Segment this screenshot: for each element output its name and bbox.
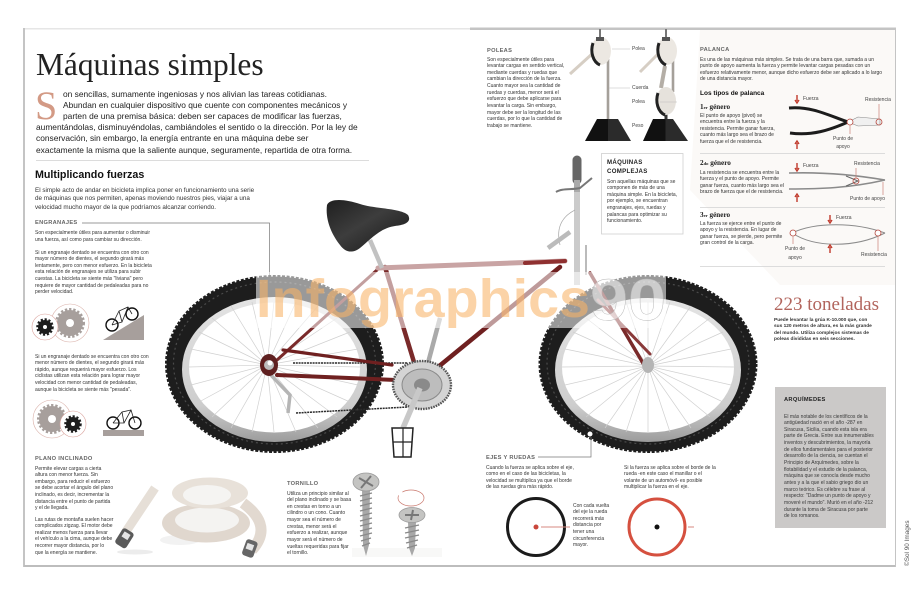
text: poleas: Cuanto mayor sea la cantidad de <box>487 83 560 89</box>
frame <box>277 261 650 380</box>
text: tornillo: vueltas requeridas para fijar <box>287 544 349 550</box>
text: circumference note: tener una <box>573 529 594 535</box>
heading: primer género: 1er género <box>700 102 730 110</box>
text: poleas: Son especialmente útiles para <box>487 56 554 62</box>
text: plano inclinado <box>35 466 113 511</box>
text: máquinas complejas: por ejemplo, se encuentran <box>607 198 668 204</box>
text: plano inclinado: inclinado, es decir, incrementar la <box>35 492 109 498</box>
text: engranaje mayor: perder velocidad. <box>35 289 73 295</box>
text: arquímedes: durante la toma de Siracusa por parte <box>784 507 868 513</box>
text: máquinas complejas: Son aquellas máquinas que se <box>607 178 675 184</box>
text: máquinas complejas: componen de más de una <box>607 185 665 191</box>
text: arquímedes: El más notable de los científicos de la <box>784 414 868 420</box>
label: resistencia 2: Resistencia <box>854 161 880 167</box>
text: arquímedes: respecto: "Dadme un punto de apoyo y <box>784 493 871 499</box>
text: máquinas complejas: máquina simple. En la bicicleta, <box>607 192 677 198</box>
text: segundo género: La resistencia se encuentra entre la <box>700 170 779 176</box>
text: segundo género: brazo de fuerza que el de resistencia. <box>700 189 783 195</box>
label: punto de apoyo 2: Punto de apoyo <box>850 196 885 202</box>
text: engranaje menor: aunque la bicicleta se siente más "pesada". <box>35 387 131 393</box>
text: tornillo: Utiliza un principio similar al <box>287 490 349 496</box>
text: tercer género: gran control de la carga. <box>700 240 754 246</box>
text: tornillo <box>287 490 352 556</box>
heading: ejes y ruedas: EJES Y RUEDAS <box>486 455 535 461</box>
text: engranaje mayor: requiere de mayor cantidad de pedaleadas para no <box>35 283 148 289</box>
label: fuerza 1: Fuerza <box>803 96 819 102</box>
text: palanca: esfuerzo relativamente menor, aunque dicho esfuerzo debe ser aplicado a lo largo <box>700 70 882 76</box>
text: palanca: punto de apoyo aumenta la fuerza y permite levantar cargas pesadas con un <box>700 63 870 69</box>
handlebar <box>548 160 592 285</box>
text: tercer género: ganar fuerza, se pierde, pero permite <box>700 234 782 240</box>
text: primer género: cuanto más largo sea el brazo de <box>700 132 774 138</box>
text: poleas: levantar cargas en sentido vertical, <box>487 63 564 69</box>
text: palanca <box>700 56 882 82</box>
text: engranaje mayor: mayor número de dientes, el segundo girará más <box>35 256 144 262</box>
text: poleas <box>487 56 564 129</box>
text: rutas de montaña: el vehículo a la cima, aunque debe <box>35 536 112 542</box>
text: engranaje menor: velocidad con menor cantidad de pedaleadas, <box>35 380 137 386</box>
text: engranaje menor: ciclistas utilizan esta relación para lograr mayor <box>35 373 140 379</box>
text: engranaje menor: Si un engranaje dentado se encuentra con otro con <box>35 354 149 360</box>
text: ejes y ruedas eje: de las ruedas gira más rápido. <box>486 484 553 490</box>
label: punto de apoyo 3: apoyo <box>788 254 802 260</box>
text: arquímedes: marco teórico. Es célebre su frase al <box>784 487 865 493</box>
icon: bicycle on slope <box>103 307 144 340</box>
heading: máquinas complejas: MÁQUINAS <box>607 159 643 166</box>
text: poleas: levantar la carga. Sin embargo, <box>487 103 556 109</box>
text: plano inclinado: Permite elevar cargas a cierta <box>35 466 101 472</box>
wheel: axle force <box>508 498 570 556</box>
label: resistencia 1: Resistencia <box>865 97 891 103</box>
text: arquímedes: moveré el mundo". Murió en el año -212 <box>784 500 873 506</box>
box: arquímedes background <box>775 387 886 528</box>
text: engranajes <box>35 230 150 243</box>
text: segundo género: fuerza y el punto de apoyo. Permite <box>700 176 779 182</box>
text: engranaje mayor: esta relación de engranajes se utiliza para subir <box>35 269 141 275</box>
text: máquinas complejas: palancas para optimizar su <box>607 212 667 218</box>
text: arquímedes: máquina que se conocía desde mucho <box>784 473 870 479</box>
lever: second class nutcracker <box>789 163 885 202</box>
callout text: poleas divididas en seis secciones. <box>774 337 855 342</box>
callout text: Puede levantar la grúa K-10.000 que, con <box>774 318 867 322</box>
pulley: single <box>570 29 631 141</box>
intro text: parten de una premisa básica: deben ser capaces de modificar las fuerzas, <box>63 111 342 121</box>
bicycle <box>166 160 756 457</box>
text: rutas de montaña <box>35 516 114 556</box>
text: multiplicando fuerzas: El simple acto de andar en bicicleta implica poner en funcionamiento una serie <box>35 186 254 194</box>
credit: ©Sol 90 Images <box>904 520 911 566</box>
text: engranaje mayor: cuestas. La bicicleta se siente más "liviana" pero <box>35 276 143 282</box>
text: plano inclinado: y el de llegada. <box>35 505 69 511</box>
text: primer género: resistencia. Permite ganar fuerza, <box>700 126 775 132</box>
text: tornillo: mayor sea el número de <box>287 517 341 523</box>
rear derailleur and hub <box>260 354 290 413</box>
heading: tornillo: TORNILLO <box>287 481 318 487</box>
text: circumference note: Con cada vuelta <box>573 502 609 508</box>
text: ejes y ruedas borde: multiplicar la fuerza en el eje. <box>624 484 689 490</box>
text: arquímedes: antes y a la que el sabio griego dio un <box>784 480 868 486</box>
text: tornillo: mayor será el número de <box>287 537 343 543</box>
text: ejes y ruedas eje: velocidad se multiplica ya que el borde <box>486 478 572 484</box>
text: rutas de montaña: complicados zigzag. El motor debe <box>35 523 113 529</box>
text: rutas de montaña: realizar menos fuerza para llevar <box>35 530 108 536</box>
text: segundo género <box>700 170 784 195</box>
text: palanca: de una distancia mayor. <box>700 76 753 82</box>
text: plano inclinado: se debe acortar el ángulo del plano <box>35 485 113 491</box>
icon: gears small driving large <box>32 304 89 342</box>
heading: máquinas complejas: COMPLEJAS <box>607 168 648 175</box>
text: ejes y ruedas eje: Cuando la fuerza se aplica sobre el eje, <box>486 464 574 470</box>
label: resistencia 3: Resistencia <box>861 252 887 258</box>
text: arquímedes: de los romanos. <box>784 513 820 519</box>
text: arquímedes: desarrollo de la ciencia, se cuentan el <box>784 453 868 459</box>
seat post <box>370 240 382 268</box>
crank and chainring <box>392 318 451 457</box>
heading: multiplicando fuerzas: Multiplicando fuerzas <box>35 169 144 181</box>
text: tercer género: apoyo y la resistencia. En lugar de <box>700 227 776 233</box>
text: poleas: mediante cuerdas y ruedas que <box>487 70 557 76</box>
text: tercer género: La fuerza se ejerce entre el punto de <box>700 220 781 226</box>
rear wheel <box>166 276 382 452</box>
label: punto de apoyo 1: Punto de <box>833 136 853 142</box>
text: poleas: esfuerzo que debe aplicarse para <box>487 96 561 102</box>
text: palanca: Es una de las máquinas más simples. Se trata de una barra que, sumada a un <box>700 56 874 62</box>
text: tornillo: crestas, menor será el <box>287 524 336 530</box>
text: poleas: cambian la dirección de la fuerza. <box>487 76 562 82</box>
heading: palanca: PALANCA <box>700 47 729 53</box>
text: tornillo: esfuerzo a realizar, aunque <box>287 530 347 536</box>
label: fuerza 2: Fuerza <box>803 163 819 169</box>
text: plano inclinado: embargo, para reducir el esfuerzo <box>35 479 110 485</box>
icon: gears large driving small <box>33 400 86 438</box>
text: rutas de montaña: recorrer mayor distancia, por lo <box>35 543 104 549</box>
text: arquímedes: flotabilidad y el estudio de la palanca, <box>784 467 867 473</box>
icon: screws <box>352 473 442 557</box>
heading: plano inclinado: PLANO INCLINADO <box>35 456 93 462</box>
text: ejes y ruedas eje: como en el caso de las bicicletas, la <box>486 471 566 477</box>
label: fuerza 3: Fuerza <box>836 215 852 221</box>
text: primer género: fuerza que el de resistencia. <box>700 139 763 145</box>
text: tornillo: el tornillo. <box>287 550 308 556</box>
text: arquímedes: de ellos fundamentales para el posterior <box>784 447 873 453</box>
text: poleas: trabajo se mantiene. <box>487 123 532 129</box>
text: circumference note: circunferencia <box>573 536 604 542</box>
intro text: on sencillas, sumamente ingeniosas y nos alivian las tareas cotidianas. <box>63 88 327 98</box>
text: tornillo: en crestas en torno a un <box>287 504 341 510</box>
label: punto de apoyo 1 <box>833 136 853 150</box>
text: rutas de montaña: Las rutas de montaña suelen hacer <box>35 516 113 522</box>
front wheel <box>540 276 756 452</box>
pulley: compound <box>640 29 688 141</box>
text: engranaje mayor: lentamente, pero con menor esfuerzo. En la bicicleta <box>35 263 152 269</box>
front hub <box>642 357 654 373</box>
icon: spiral road <box>114 478 261 559</box>
intro text: exactamente la misma que la saliente aunque, seguramente, repartida de otra forma. <box>36 145 352 155</box>
heading: máquinas complejas <box>607 158 648 175</box>
heading: poleas: POLEAS <box>487 48 512 54</box>
lever: first class pliers <box>789 95 882 149</box>
wheel: rim force <box>629 499 694 555</box>
text: máquinas complejas <box>607 178 677 224</box>
callout text: del mundo. Utiliza complejos sistemas de <box>774 331 869 336</box>
text: plano inclinado: distancia entre el punto de partida <box>35 499 110 505</box>
text: tornillo: cilindro o un cono. Cuanto <box>287 510 345 516</box>
heading: engranajes: ENGRANAJES <box>35 220 78 226</box>
text: engranaje mayor: Si un engranaje dentado se encuentra con otro con <box>35 250 149 256</box>
text: poleas: cuerdas, por lo que la cantidad de <box>487 116 562 122</box>
text: rutas de montaña: que la energía se mantiene. <box>35 550 97 556</box>
text: plano inclinado: altura con menor fuerza. Sin <box>35 472 98 478</box>
text: multiplicando fuerzas: de máquinas que nos permiten, apenas moviendo nuestros pies, viajar a una <box>35 195 250 202</box>
text: arquímedes: Principio de Arquímedes, sobre la <box>784 460 859 466</box>
callout heading: 223 toneladas: 223 toneladas <box>774 294 879 315</box>
connector: ejes y ruedas to front wheel <box>538 432 592 457</box>
text: circumference note: mayor. <box>573 542 588 548</box>
text: multiplicando fuerzas <box>35 186 254 210</box>
text: tornillo: del plano inclinado y se basa <box>287 497 351 503</box>
intro text <box>36 88 358 155</box>
watermark: 90 <box>590 268 666 333</box>
heading: segundo género: 2do género <box>700 158 731 166</box>
label: peso: Peso <box>632 123 643 129</box>
label: polea inferior: Polea <box>632 99 645 105</box>
box: máquinas complejas frame <box>602 154 683 234</box>
text: engranaje menor <box>35 354 149 393</box>
text: primer género: encuentra entre la fuerza y la <box>700 119 765 125</box>
label: punto de apoyo 1: apoyo <box>836 144 850 150</box>
text: engranaje mayor <box>35 250 152 295</box>
text: circumference note <box>573 502 610 548</box>
text: ejes y ruedas borde <box>624 464 716 490</box>
text: ejes y ruedas borde: rueda -en este caso el manillar o el <box>624 471 702 477</box>
drop cap: S <box>35 83 57 128</box>
text: engranaje menor: rápido, aunque requerirá mayor esfuerzo. Los <box>35 367 136 373</box>
lever: third class tongs <box>790 215 885 253</box>
text: poleas: mayor debe ser la longitud de las <box>487 110 561 116</box>
intro text: aumentándolas, disminuyéndolas, cambiándoles el sentido o la dirección. Por la ley de <box>36 122 358 132</box>
text: arquímedes: Siracusa, Sicilia, cuando esta isla era <box>784 427 867 433</box>
text: circumference note: recorrerá más <box>573 516 604 522</box>
callout text: sus 120 metros de altura, es la más grande <box>774 324 872 329</box>
text: tercer género <box>700 220 782 246</box>
text: primer género: El punto de apoyo (pivot) se <box>700 112 762 118</box>
text: engranaje menor: menor número de dientes, el segundo girará más <box>35 360 144 366</box>
text: circumference note: distancia por <box>573 522 601 528</box>
heading: arquímedes: ARQUÍMEDES <box>784 397 826 403</box>
text: máquinas complejas: engranajes, ejes, ruedas y <box>607 205 666 211</box>
text: multiplicando fuerzas: velocidad mucho mayor de la que podríamos alcanzar corriendo. <box>35 204 216 210</box>
callout text <box>774 318 872 342</box>
text: arquímedes <box>784 414 874 519</box>
seat <box>327 200 409 252</box>
label: cuerda: Cuerda <box>632 85 648 91</box>
text: ejes y ruedas borde: Si la fuerza se aplica sobre el borde de la <box>624 464 716 470</box>
text: arquímedes: parte de Grecia. Entre sus innumerables <box>784 433 874 439</box>
chain <box>293 363 408 413</box>
text: engranajes: Son especialmente útiles para aumentar o disminuir <box>35 230 150 236</box>
text: arquímedes: antigüedad nació en el año -287 en <box>784 420 862 426</box>
text: ejes y ruedas borde: volante de un automóvil- es posible <box>624 478 702 484</box>
intro text: conservación, sin embargo, la energía entrante en una máquina debe ser <box>36 133 308 143</box>
text: máquinas complejas: funcionamiento. <box>607 218 642 224</box>
text: circumference note: del eje la rueda <box>573 509 607 515</box>
intro text: Abundan en cualquier dispositivo que cuente con componentes mecánicos y <box>63 100 347 110</box>
text: engranajes: una fuerza, así como para cambiar su dirección. <box>35 237 142 243</box>
text: poleas: ruedas y cuerdas, menor será el <box>487 90 559 96</box>
text: arquímedes: inventos y descubrimientos, la mayoría <box>784 440 870 446</box>
heading: los tipos de palanca: Los tipos de palanca <box>700 90 764 97</box>
heading: tercer género: 3er género <box>700 210 730 218</box>
text: ejes y ruedas eje <box>486 464 574 490</box>
connector: engranajes to rear hub <box>82 223 270 345</box>
label: polea superior: Polea <box>632 46 645 52</box>
label: punto de apoyo 3: Punto de <box>785 246 805 252</box>
text: primer género <box>700 112 775 145</box>
icon: bicycle on flat ground <box>103 410 144 436</box>
title: Máquinas simples <box>36 47 264 82</box>
text: segundo género: ganar fuerza, cuanto más largo sea el <box>700 183 784 189</box>
watermark: Infographics <box>256 269 590 329</box>
label: punto de apoyo 3 <box>785 246 805 260</box>
